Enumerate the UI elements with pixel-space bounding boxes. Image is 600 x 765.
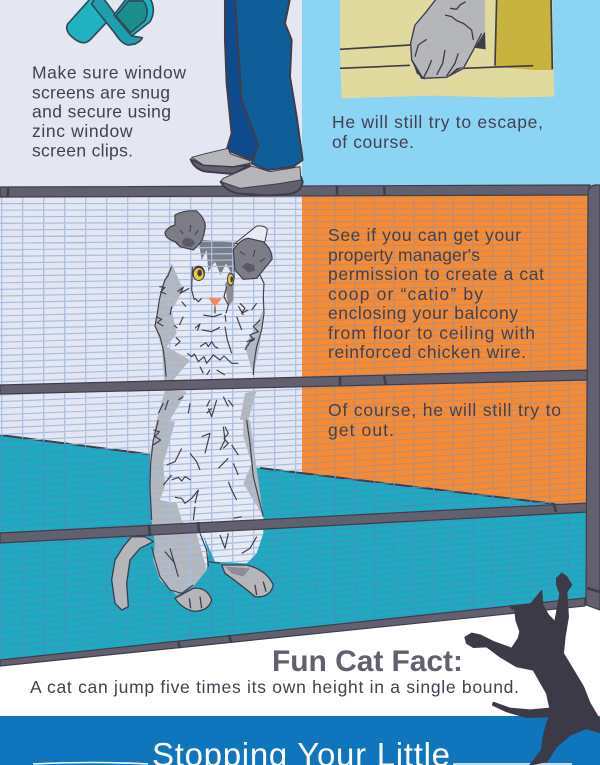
text: fun cat fact body: A cat can jump five times its own height in a single bound.	[30, 677, 519, 697]
cat nose	[208, 298, 222, 307]
text: catio advice: reinforced chicken wire.	[328, 342, 526, 362]
text: still try to escape: He will still try to escape,	[332, 112, 543, 132]
illustration: black cat silhouette leaping	[465, 573, 600, 765]
back trouser leg	[225, 0, 259, 160]
text: he will try to get out: get out.	[328, 420, 394, 440]
cat ear	[235, 226, 267, 245]
illustration: cat paw on yellow window	[340, 0, 554, 98]
text: catio advice: permission to create a cat	[328, 264, 544, 284]
rail ties	[8, 186, 600, 648]
text: he will try to get out	[328, 400, 561, 440]
middle rail	[0, 370, 588, 394]
text: window screen clip tip: screens are snug	[32, 82, 170, 102]
illustration: gray tabby cat standing against wire	[0, 197, 302, 612]
window frame dark panel	[495, 0, 553, 70]
text: window screen clip tip: Make sure window	[32, 62, 186, 82]
text: window screen clip tip: zinc window	[32, 121, 133, 141]
text: catio advice	[328, 225, 544, 362]
cat tail	[112, 537, 153, 610]
cat feet	[175, 565, 273, 611]
cat head markings	[198, 239, 235, 280]
front shoe	[221, 166, 303, 196]
text: still try to escape: of course.	[332, 132, 414, 152]
front trouser leg	[235, 0, 303, 170]
heading: fun cat fact: Fun Cat Fact:	[272, 645, 463, 678]
lower rail	[0, 503, 588, 543]
bottom rail	[0, 598, 585, 666]
top rail	[0, 185, 590, 197]
right post	[586, 185, 600, 610]
cat body	[150, 240, 265, 595]
text: he will try to get out: Of course, he will still try to	[328, 400, 561, 420]
text: catio advice: property manager's	[328, 245, 480, 265]
text: catio advice: See if you can get your	[328, 225, 521, 245]
cat cheek stripe	[225, 275, 234, 307]
heading flourishes	[33, 762, 572, 764]
text: window screen clip tip: and secure using	[32, 102, 171, 122]
panel: balcony fence background	[0, 190, 590, 662]
chicken wire on orange and teal	[0, 197, 588, 665]
panel: escape background	[302, 0, 600, 190]
cat left paw	[165, 211, 205, 250]
text: catio advice: coop or “catio” by	[328, 284, 483, 304]
illustration: person's legs and shoes	[191, 0, 303, 196]
window lines	[340, 0, 552, 69]
text: catio advice: enclosing your balcony	[328, 303, 518, 323]
panel: blue section header	[0, 716, 600, 765]
text: window screen clip tip: screen clips.	[32, 141, 133, 161]
text: still try to escape	[332, 112, 543, 152]
cat fur ink lower	[150, 420, 263, 593]
cat right paw	[233, 238, 272, 279]
cat left eye	[192, 266, 205, 281]
fence rails	[0, 185, 600, 666]
window sill	[340, 0, 554, 98]
cat right eye	[227, 273, 234, 286]
icon: zinc window screen clip	[67, 0, 153, 45]
cat fur shading	[150, 263, 263, 595]
cat paws, ear, eyes and nose	[165, 211, 272, 307]
paw	[410, 0, 486, 80]
cat fur ink upper	[155, 267, 264, 417]
light mesh over cat	[0, 197, 302, 592]
text: catio advice: from floor to ceiling with	[328, 323, 535, 343]
text: window screen clip tip	[32, 62, 186, 161]
panel: window screen clips background	[0, 0, 302, 190]
back shoe	[191, 148, 250, 174]
